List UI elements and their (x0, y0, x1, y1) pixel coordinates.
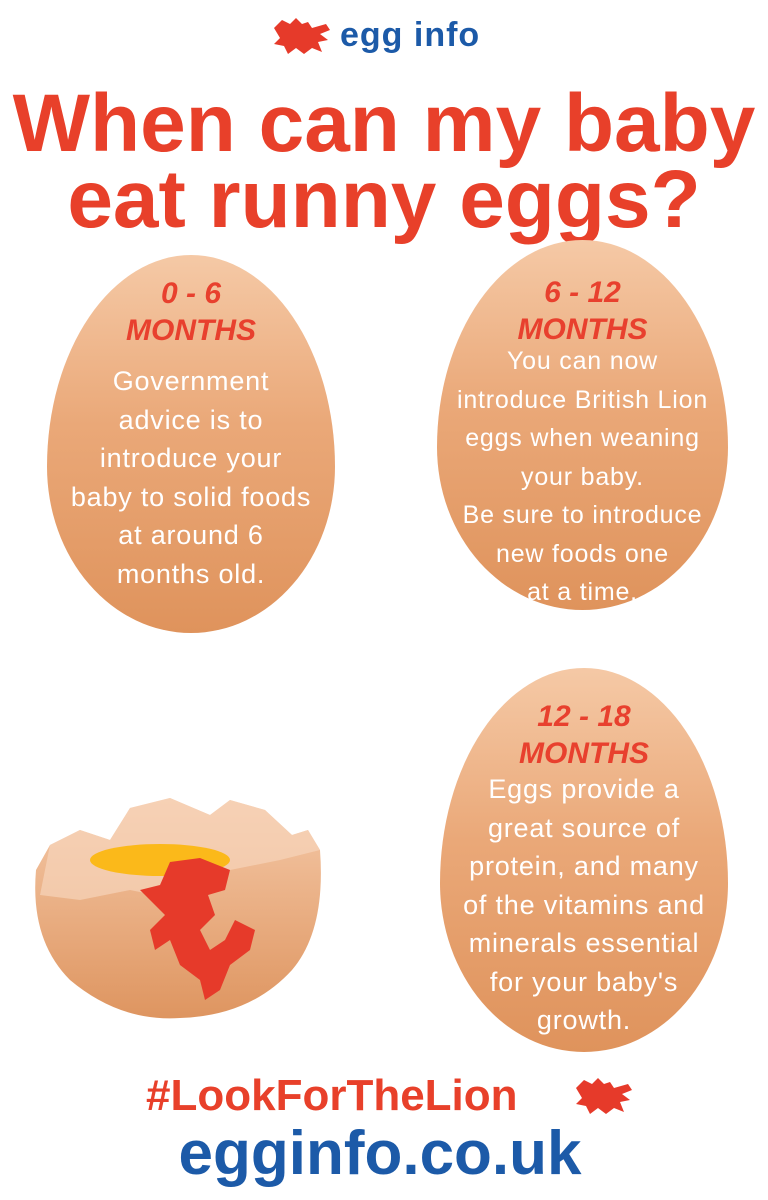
text: 6-12: You can now (507, 347, 658, 375)
text: 0-6: baby to solid foods (71, 482, 311, 512)
text: 12-18: great source of (488, 812, 680, 842)
text: 6-12: new foods one (496, 540, 669, 568)
text: 12-18: minerals essential (469, 928, 699, 958)
label: 0-6 months: 0 - 6 (161, 277, 221, 310)
label: 6-12 months (518, 276, 648, 346)
text: 0-6: at around 6 (118, 520, 264, 550)
hashtag: #LookForTheLion (146, 1071, 518, 1120)
text: 6-12: at a time. (527, 578, 638, 606)
logo (274, 16, 480, 54)
icon: lion small (576, 1078, 632, 1114)
panel: 12-18 months (440, 668, 728, 1052)
text: 12-18: Eggs provide a (488, 774, 680, 804)
text: 0-6: introduce your (100, 443, 282, 473)
text: 12-18 (463, 774, 705, 1035)
website: egginfo.co.uk (178, 1119, 582, 1188)
text: 6-12: introduce British Lion (457, 386, 708, 414)
text: 12-18: protein, and many (469, 851, 699, 881)
label: 6-12 months: MONTHS (518, 313, 648, 346)
text: 12-18: of the vitamins and (463, 890, 705, 920)
text: 6-12 (457, 347, 708, 606)
title: When can my baby (13, 78, 755, 169)
text: 12-18: growth. (537, 1005, 631, 1035)
label: 12-18 months (519, 700, 649, 770)
label: 6-12 months: 6 - 12 (544, 276, 621, 309)
text: 6-12: Be sure to introduce (463, 501, 702, 529)
text: 0-6 (71, 366, 311, 588)
title: eat runny eggs? (67, 154, 701, 245)
label: 12-18 months: 12 - 18 (537, 700, 631, 733)
panel: 6-12 months (437, 240, 728, 610)
text: 0-6: advice is to (119, 404, 263, 434)
text: 0-6: Government (113, 366, 269, 396)
panel: 0-6 months (47, 255, 335, 633)
title (12, 78, 755, 245)
text: 6-12: eggs when weaning (465, 424, 700, 452)
text: 12-18: for your baby's (490, 966, 678, 996)
label: 0-6 months: MONTHS (126, 314, 256, 347)
icon: lion logo (274, 18, 330, 54)
logo text: egg info (340, 16, 480, 54)
text: 0-6: months old. (117, 558, 265, 588)
icon: cracked egg with lion (35, 798, 321, 1018)
text: 6-12: your baby. (521, 462, 644, 490)
label: 12-18 months: MONTHS (519, 737, 649, 770)
label: 0-6 months (126, 277, 256, 347)
